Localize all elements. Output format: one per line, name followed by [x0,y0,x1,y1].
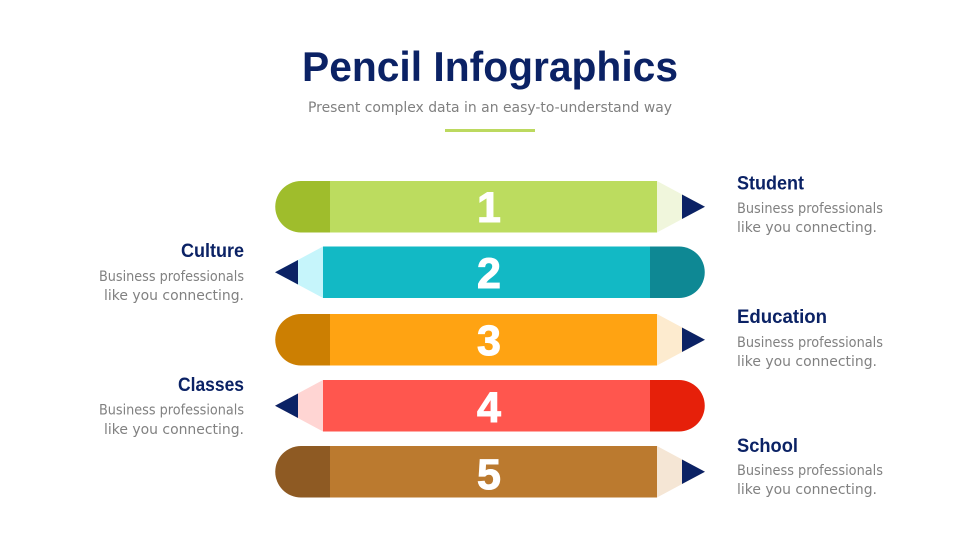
pencil 2: 2 [477,250,501,298]
pencil 4 [275,380,705,432]
pencil 3 [275,314,705,366]
title underline [445,129,535,132]
label: Education: like you connecting. [737,354,877,370]
label: Student: Student [737,174,805,194]
label: Education: Education [737,307,827,328]
label: Classes: like you connecting. [104,422,244,438]
label: Education: Business professionals [737,335,883,351]
label: School [737,436,883,498]
label: Student: Business professionals [737,201,883,217]
label: Classes [99,375,244,438]
label: Culture: Culture [181,241,244,262]
label: School: School [737,436,798,457]
label: Classes: Classes [178,375,244,396]
label: Student [737,174,883,236]
pencil 3: 3 [477,317,501,365]
label: School: like you connecting. [737,482,877,498]
pencil 2 [275,246,705,298]
label: Education [737,307,883,370]
pencil 5 [275,446,705,499]
subtitle: Present complex data in an easy-to-understand way [308,100,672,116]
label: Student: like you connecting. [737,220,877,236]
label: School: Business professionals [737,463,883,479]
label: Culture [99,241,244,304]
label: Culture: like you connecting. [104,288,244,304]
pencil 4: 4 [477,384,501,432]
title: Pencil Infographics [302,43,678,90]
pencil 1 [275,181,705,232]
label: Culture: Business professionals [99,269,244,285]
pencil 5: 5 [477,451,501,499]
pencil 1: 1 [477,184,501,232]
label: Classes: Business professionals [99,402,244,418]
